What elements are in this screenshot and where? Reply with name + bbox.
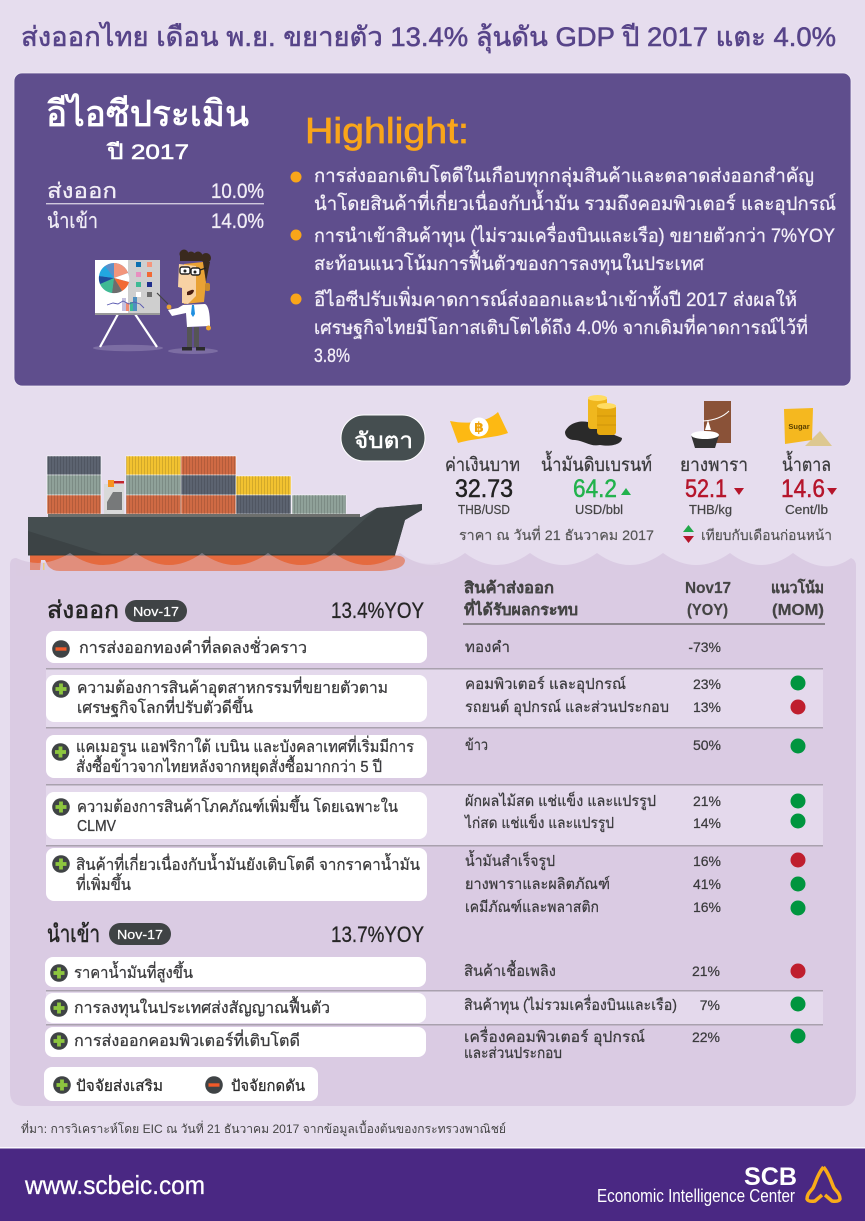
table: affected products: 41% bbox=[693, 876, 721, 892]
factor: commodity demand: ความต้องการสินค้าโภคภัณฑ์เพิ่มขึ้น โดยเฉพาะใน bbox=[77, 795, 398, 816]
panel: lower scalloped table background bbox=[10, 553, 856, 1106]
indicator: brent oil bbox=[541, 395, 652, 517]
legend: factors bbox=[44, 1067, 318, 1101]
table header: สินค้าส่งออก bbox=[464, 579, 554, 597]
legend: factors: ปัจจัยส่งเสริม bbox=[76, 1078, 163, 1095]
indicator: brent oil: น้ำมันดิบเบรนท์ bbox=[541, 451, 652, 476]
section: imports heading: นำเข้า bbox=[47, 921, 100, 948]
factor: industrial demand: ความต้องการสินค้าอุตสาหกรรมที่ขยายตัวตาม bbox=[77, 676, 388, 698]
table header: (MOM) bbox=[772, 602, 824, 619]
table: affected products: 14% bbox=[693, 815, 721, 831]
website: www.scbeic.com bbox=[24, 1170, 205, 1200]
indicator: rubber: 52.1 bbox=[685, 475, 727, 503]
footer bbox=[0, 1147, 865, 1221]
label: watch pill: จับตา bbox=[354, 428, 413, 453]
bullet list: 3.8% bbox=[314, 346, 350, 367]
factor: rice orders: สั่งซื้อข้าวจากไทยหลังจากหยุดสั่งซื้อมากกว่า 5 ปี bbox=[76, 755, 382, 777]
section: imports heading: 13.7%YOY bbox=[331, 922, 424, 947]
table header: Nov17 bbox=[685, 580, 731, 597]
table: affected products: และส่วนประกอบ bbox=[464, 1045, 562, 1062]
heading: EIC forecast: อีไอซีประเมิน bbox=[46, 93, 249, 134]
brand subtitle: Economic Intelligence Center bbox=[597, 1186, 795, 1206]
table header: ที่ได้รับผลกระทบ bbox=[464, 598, 578, 619]
indicator: brent oil: USD/bbl bbox=[575, 503, 623, 517]
factor: gold exports: การส่งออกทองคำที่ลดลงชั่วคราว bbox=[79, 636, 307, 657]
brand name: SCB bbox=[744, 1163, 797, 1191]
table: affected products: รถยนต์ อุปกรณ์ และส่วนประกอบ bbox=[465, 699, 669, 717]
factor: oil related goods: สินค้าที่เกี่ยวเนื่องกับน้ำมันยังเติบโตดี จากราคาน้ำมัน bbox=[76, 853, 420, 874]
section: exports heading: Nov-17 bbox=[133, 604, 179, 619]
presenter head bbox=[184, 262, 206, 304]
subheading: year: ปี 2017 bbox=[106, 141, 189, 164]
forecast table: ส่งออก bbox=[47, 180, 117, 203]
section: imports heading bbox=[47, 921, 424, 948]
section: exports heading bbox=[47, 597, 424, 624]
section: exports heading: 13.4%YOY bbox=[331, 598, 424, 623]
forecast table: 14.0% bbox=[211, 210, 264, 233]
factor: industrial demand bbox=[46, 675, 427, 722]
icon: oil barrels bbox=[565, 395, 622, 446]
factor: rice orders: แคเมอรูน แอฟริกาใต้ เบนิน และบังคลาเทศที่เริ่มมีการ bbox=[76, 735, 414, 757]
bullet list: เศรษฐกิจไทยมีโอกาสเติบโตได้ถึง 4.0% จากเดิมที่คาดการณ์ไว้ที่ bbox=[314, 314, 808, 339]
indicator: sugar bbox=[781, 408, 837, 517]
factor: oil price bbox=[45, 957, 426, 987]
table header bbox=[463, 578, 825, 625]
price date note: ราคา ณ วันที่ 21 ธันวาคม 2017 bbox=[459, 526, 654, 543]
table: affected products: 21% bbox=[692, 963, 720, 979]
table: affected products: 16% bbox=[693, 899, 721, 915]
table: affected products: 16% bbox=[693, 853, 721, 869]
factor: oil related goods: ที่เพิ่มขึ้น bbox=[76, 873, 131, 894]
table: affected products: น้ำมันสำเร็จรูป bbox=[465, 850, 555, 870]
bullet list: อีไอซีปรับเพิ่มคาดการณ์ส่งออกและนำเข้าทั้งปี 2017 ส่งผลให้ bbox=[314, 286, 797, 311]
table: affected products: 7% bbox=[700, 997, 720, 1013]
indicator: baht: THB/USD bbox=[458, 503, 510, 517]
table: affected products: 13% bbox=[693, 699, 721, 715]
table header: (YOY) bbox=[687, 602, 728, 619]
table: affected products: 50% bbox=[693, 737, 721, 753]
table: affected products: ทองคำ bbox=[465, 639, 510, 656]
indicator: rubber: ยางพารา bbox=[680, 455, 748, 476]
factor: gold exports bbox=[46, 631, 427, 663]
forecast table: นำเข้า bbox=[47, 210, 98, 233]
factor: commodity demand: CLMV bbox=[77, 818, 116, 835]
legend: factors: ปัจจัยกดดัน bbox=[231, 1078, 305, 1095]
forecast table: 10.0% bbox=[211, 180, 264, 203]
table: affected products: เคมีภัณฑ์และพลาสติก bbox=[465, 899, 599, 916]
indicator: brent oil: 64.2 bbox=[573, 475, 617, 503]
forecast table bbox=[46, 180, 264, 233]
icon: sugar bag: Sugar bbox=[788, 422, 810, 431]
table: affected products: ยางพาราและผลิตภัณฑ์ bbox=[465, 876, 610, 893]
table: affected products: -73% bbox=[688, 639, 721, 655]
table header: แนวโน้ม bbox=[771, 578, 824, 597]
factor: domestic investment: การลงทุนในประเทศส่งสัญญาณฟื้นตัว bbox=[74, 996, 330, 1018]
table: affected products: 21% bbox=[693, 793, 721, 809]
icon: baht flag: ฿ bbox=[474, 419, 484, 435]
bullet list: นำโดยสินค้าที่เกี่ยวเนื่องกับน้ำมัน รวมถึงคอมพิวเตอร์ และอุปกรณ์ bbox=[314, 190, 836, 216]
table: affected products: ข้าว bbox=[465, 737, 488, 754]
table: affected products: สินค้าทุน (ไม่รวมเครื่องบินและเรือ) bbox=[464, 994, 677, 1015]
indicator: baht: 32.73 bbox=[455, 475, 513, 503]
table: affected products: 22% bbox=[692, 1029, 720, 1045]
icon: presenter with chart board bbox=[93, 250, 218, 354]
indicator: baht bbox=[445, 412, 520, 517]
table: affected products: ผักผลไม้สด แช่แข็ง และแปรรูป bbox=[465, 791, 656, 810]
water overlay over hull bbox=[16, 553, 440, 576]
indicator: sugar: น้ำตาล bbox=[782, 451, 831, 476]
bullet list bbox=[290, 164, 836, 367]
factor: industrial demand: เศรษฐกิจโลกที่ปรับตัวดีขึ้น bbox=[77, 696, 253, 717]
icon: rubber tree and cup bbox=[691, 401, 731, 448]
heading: highlight: Highlight: bbox=[305, 110, 469, 151]
panel: highlight box bbox=[14, 73, 851, 386]
factor: commodity demand bbox=[46, 792, 427, 839]
factor: computer exports: การส่งออกคอมพิวเตอร์ที่เติบโตดี bbox=[74, 1029, 300, 1050]
table: affected products: สินค้าเชื้อเพลิง bbox=[464, 960, 556, 980]
factor: oil price: ราคาน้ำมันที่สูงขึ้น bbox=[74, 961, 193, 983]
factor: computer exports bbox=[45, 1027, 426, 1057]
title: ส่งออกไทย เดือน พ.ย. ขยายตัว 13.4% ลุ้นดัน GDP ปี 2017 แตะ 4.0% bbox=[21, 22, 836, 54]
factor: domestic investment bbox=[45, 993, 426, 1023]
indicator: sugar: 14.6 bbox=[781, 475, 825, 503]
indicator: rubber: THB/kg bbox=[689, 503, 732, 517]
source note: ที่มา: การวิเคราะห์โดย EIC ณ วันที่ 21 ธันวาคม 2017 จากข้อมูลเบื้องต้นของกระทรวงพาณิชย์ bbox=[21, 1120, 506, 1137]
table: affected products: เครื่องคอมพิวเตอร์ อุปกรณ์ bbox=[464, 1026, 645, 1047]
table: affected products bbox=[464, 639, 806, 1062]
lighter table bands bbox=[46, 668, 823, 1026]
indicator: sugar: Cent/lb bbox=[785, 503, 828, 517]
table: affected products: ไก่สด แช่แข็ง และแปรรูป bbox=[464, 813, 614, 832]
bullet list: การนำเข้าสินค้าทุน (ไม่รวมเครื่องบินและเรือ) ขยายตัวกว่า 7%YOY bbox=[314, 222, 835, 248]
factor: oil related goods bbox=[46, 848, 427, 901]
icon: container ship bbox=[28, 456, 422, 571]
section: exports heading: ส่งออก bbox=[47, 597, 119, 624]
bullet list: สะท้อนแนวโน้มการฟื้นตัวของการลงทุนในประเทศ bbox=[314, 250, 704, 276]
table: affected products: คอมพิวเตอร์ และอุปกรณ์ bbox=[465, 676, 626, 694]
table: affected products: 23% bbox=[693, 676, 721, 692]
label: watch pill bbox=[341, 415, 425, 461]
indicator: baht: ค่าเงินบาท bbox=[445, 455, 520, 476]
factor: rice orders bbox=[46, 735, 427, 778]
presenter body bbox=[168, 304, 210, 327]
icon: SCB logo bbox=[807, 1167, 840, 1201]
section: imports heading: Nov-17 bbox=[117, 927, 163, 942]
legend: month comparison: เทียบกับเดือนก่อนหน้า bbox=[701, 527, 832, 543]
bullet list: การส่งออกเติบโตดีในเกือบทุกกลุ่มสินค้าและตลาดส่งออกสำคัญ bbox=[314, 164, 814, 188]
indicator: rubber bbox=[680, 401, 748, 517]
